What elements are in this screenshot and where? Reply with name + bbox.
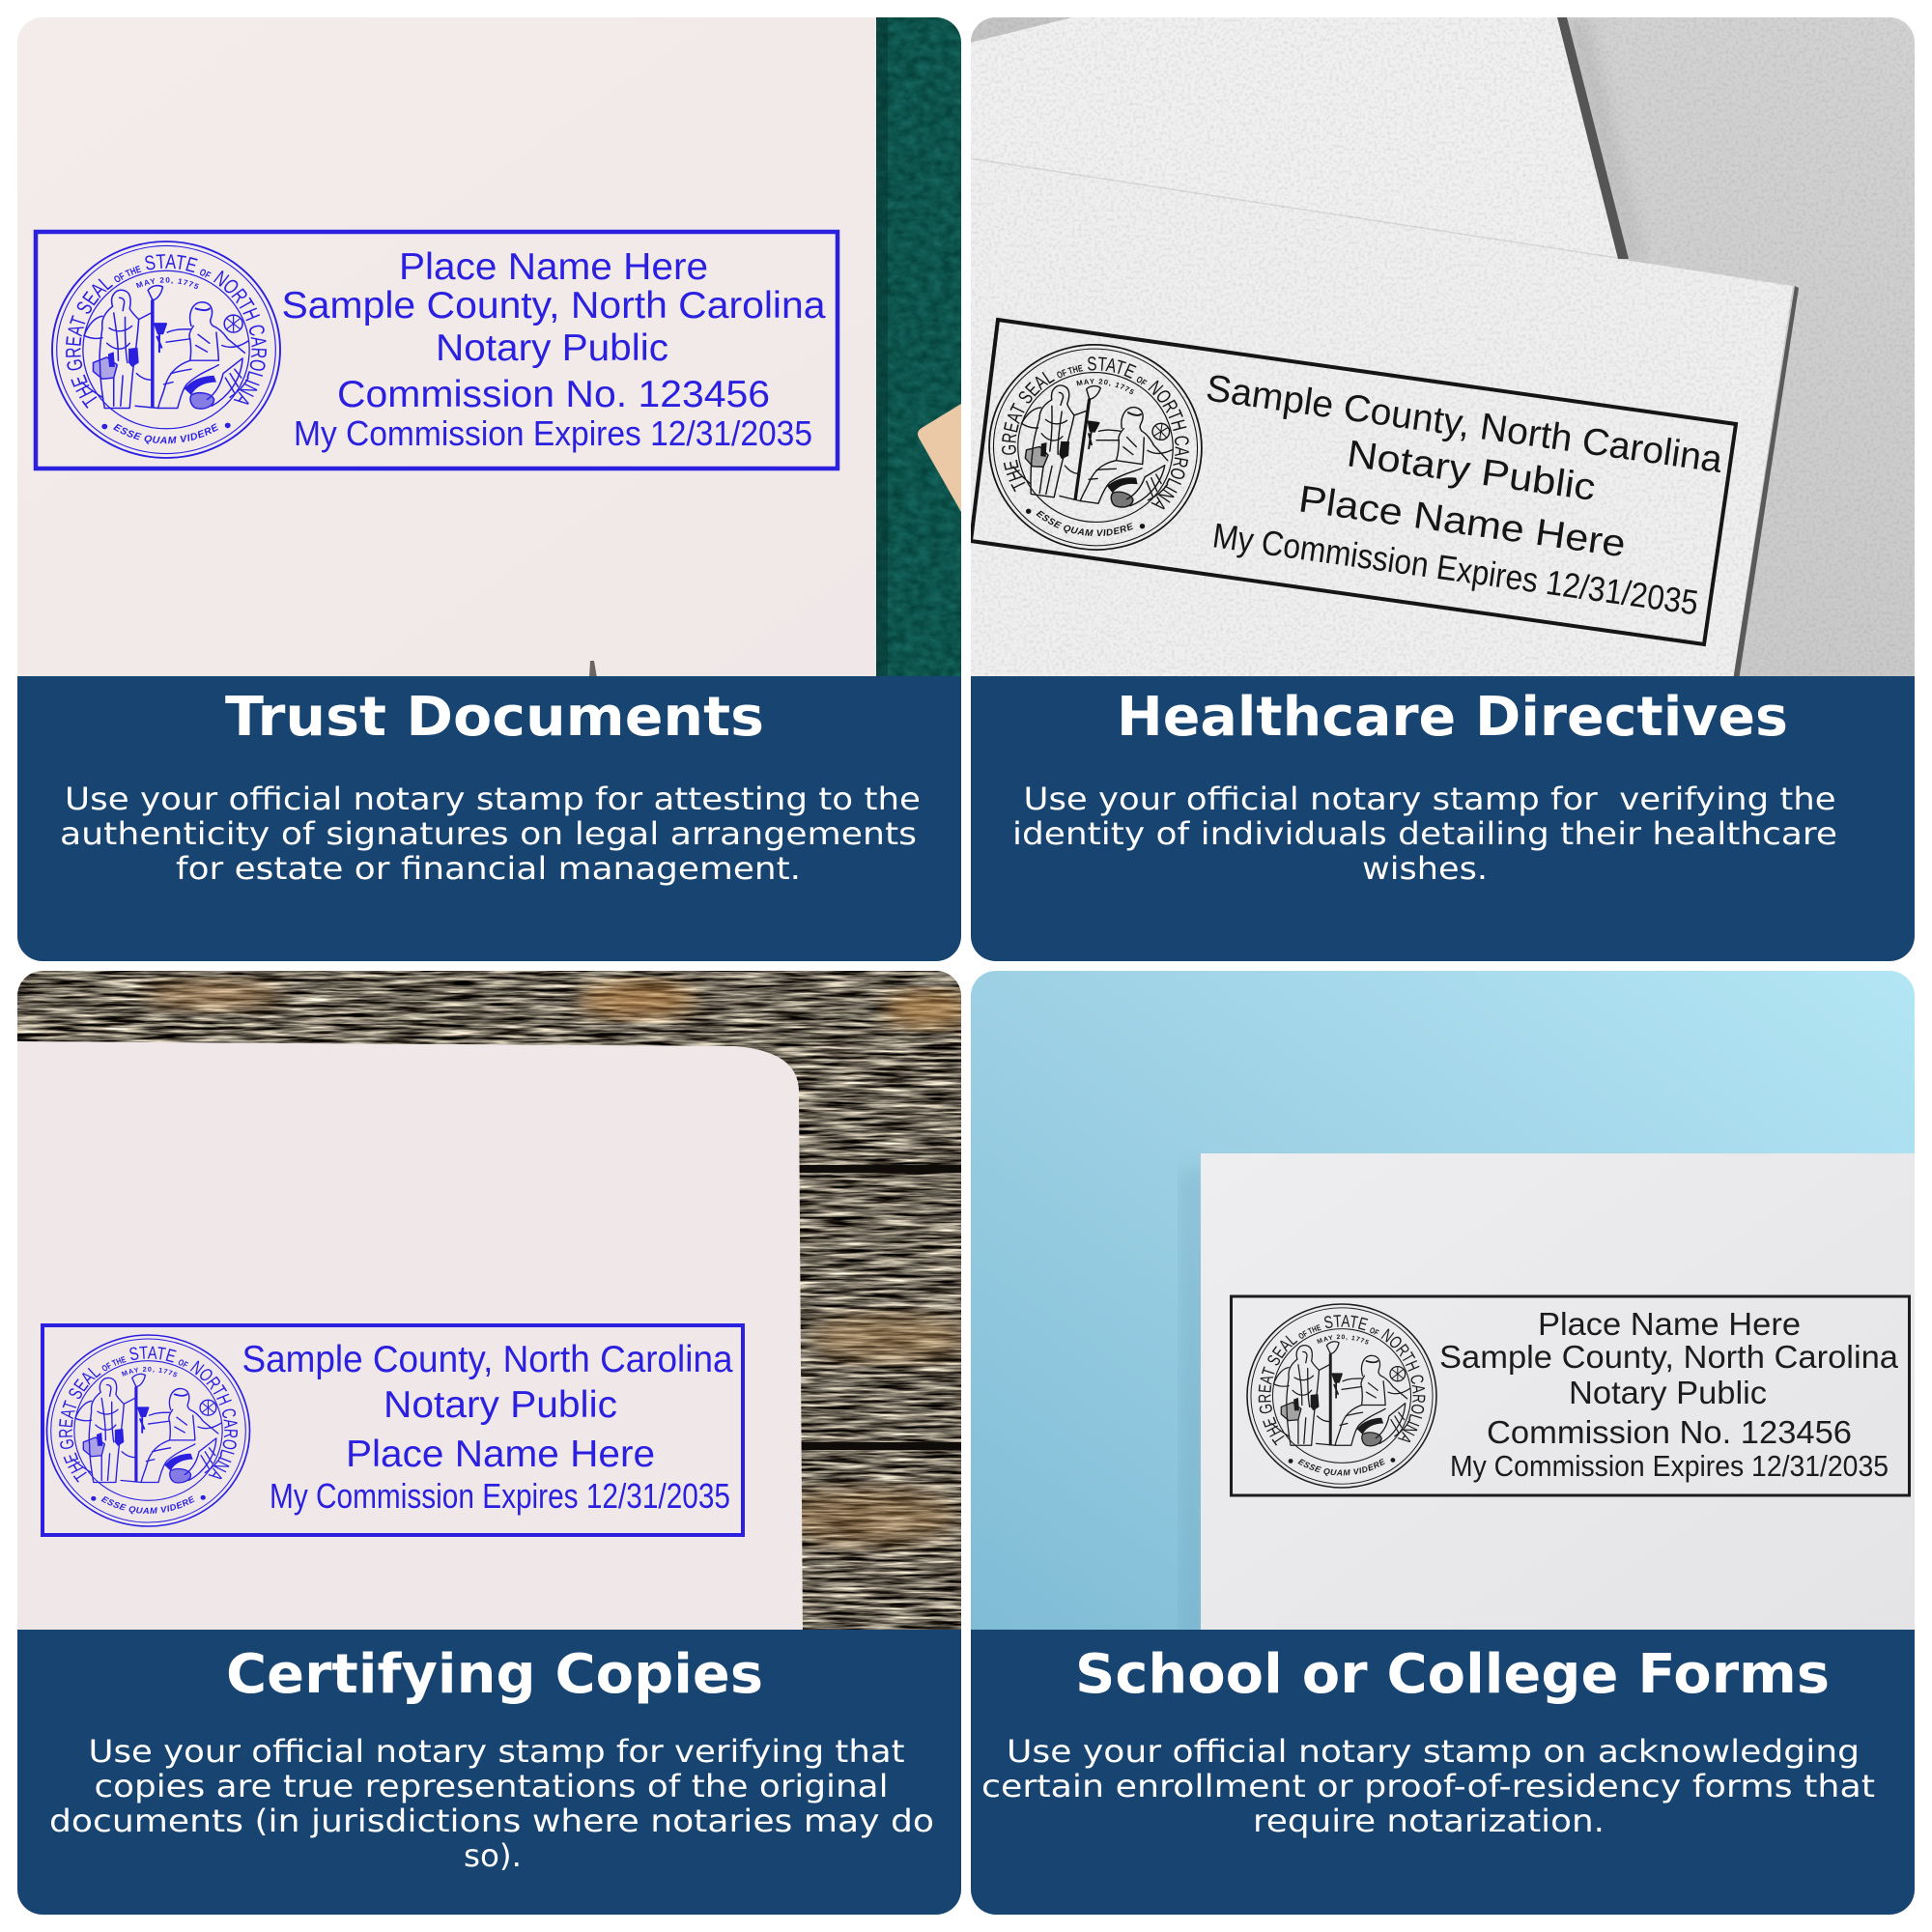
heading: Trust Documents <box>225 686 764 749</box>
caption band <box>971 676 1915 961</box>
stamp text: Notary Public <box>436 327 668 369</box>
caption band <box>17 676 961 961</box>
stamp text: My Commission Expires 12/31/2035 <box>1210 515 1701 622</box>
stamp text <box>282 246 826 453</box>
stamp text: Place Name Here <box>1296 478 1628 565</box>
body text <box>60 781 921 887</box>
seal: MAY 20, 1775 <box>1076 379 1134 394</box>
heading: Healthcare Directives <box>1117 686 1788 749</box>
body text: Use your official notary stamp for verifying the <box>1024 781 1835 817</box>
seal: MAY 20, 1775 <box>122 1366 178 1378</box>
panel: School or College Forms <box>971 971 1915 1915</box>
stamp text: Sample County, North Carolina <box>1439 1339 1899 1375</box>
seal: MAY 20, 1775 <box>1317 1335 1370 1345</box>
photo: paper on weathered wood <box>17 971 971 1637</box>
stamp text: My Commission Expires 12/31/2035 <box>294 413 812 453</box>
seal: THE GREAT SEAL OF THE STATE OF NORTH CAROLINA <box>66 254 267 409</box>
stamp text: Notary Public <box>1569 1375 1767 1410</box>
stamp text: My Commission Expires 12/31/2035 <box>270 1476 730 1516</box>
photo: stacked white papers <box>971 17 1915 684</box>
photo: white paper on light blue <box>971 971 1915 1642</box>
stamp impression: black <box>1230 1294 1911 1497</box>
stamp impression: blue <box>41 1323 745 1537</box>
body text: identity of individuals detailing their healthcare <box>1012 815 1837 852</box>
caption band <box>17 1630 961 1915</box>
body text: Use your official notary stamp for verifying that <box>89 1733 904 1770</box>
heading: School or College Forms <box>1075 1643 1830 1706</box>
body text: require notarization. <box>1253 1803 1605 1839</box>
body text <box>981 1733 1875 1839</box>
seal: MAY 20, 1775 <box>135 277 199 289</box>
stamp text: Place Name Here <box>346 1434 655 1475</box>
stamp text: Place Name Here <box>1538 1306 1801 1342</box>
seal: ESSE QUAM VIDERE <box>100 1495 195 1515</box>
body text <box>49 1733 934 1874</box>
seal <box>1246 1303 1437 1489</box>
body text: so). <box>464 1837 522 1874</box>
heading: Certifying Copies <box>226 1643 763 1706</box>
body text: Use your official notary stamp on acknowledging <box>1007 1733 1860 1770</box>
stamp text: Sample County, North Carolina <box>282 285 826 327</box>
seal: THE GREAT SEAL OF THE STATE OF NORTH CAROLINA <box>1258 1315 1426 1446</box>
stamp text: Notary Public <box>1345 433 1598 509</box>
stamp text: Notary Public <box>384 1384 617 1426</box>
body text: copies are true representations of the original <box>95 1768 888 1804</box>
seal: THE GREAT SEAL OF THE STATE OF NORTH CAROLINA <box>59 1347 238 1483</box>
body text: for estate or financial management. <box>176 850 801 887</box>
stamp impression: black <box>971 317 1739 647</box>
stamp text: Commission No. 123456 <box>337 374 770 415</box>
body text: authenticity of signatures on legal arrangements <box>60 815 917 852</box>
body text <box>1015 786 1835 879</box>
seal: ESSE QUAM VIDERE <box>1297 1459 1385 1476</box>
stamp text: Sample County, North Carolina <box>1204 367 1725 481</box>
body text: wishes. <box>1362 850 1488 887</box>
stamp impression: blue <box>33 230 840 471</box>
stamp text <box>1204 367 1725 622</box>
stamp text: Sample County, North Carolina <box>242 1339 733 1380</box>
stamp text: Commission No. 123456 <box>1487 1414 1852 1450</box>
stamp text: My Commission Expires 12/31/2035 <box>1450 1449 1889 1483</box>
seal <box>46 1334 251 1527</box>
caption band <box>971 1630 1915 1915</box>
panel: Trust Documents <box>17 17 961 961</box>
stamp text <box>1439 1306 1899 1483</box>
photo: paper on teal book <box>17 17 961 684</box>
panel: Healthcare Directives <box>971 17 1915 961</box>
body text: certain enrollment or proof-of-residency forms that <box>981 1768 1875 1804</box>
seal: THE GREAT SEAL OF THE STATE OF NORTH CAROLINA <box>1002 356 1189 510</box>
stamp text <box>242 1339 733 1516</box>
seal: ESSE QUAM VIDERE <box>113 423 218 444</box>
stamp text: Place Name Here <box>399 246 708 288</box>
seal: ESSE QUAM VIDERE <box>1036 510 1133 536</box>
seal <box>51 241 281 459</box>
body text: Use your official notary stamp for attesting to the <box>65 781 921 817</box>
panel: Certifying Copies <box>17 971 961 1915</box>
body text: documents (in jurisdictions where notaries may do <box>49 1803 934 1839</box>
